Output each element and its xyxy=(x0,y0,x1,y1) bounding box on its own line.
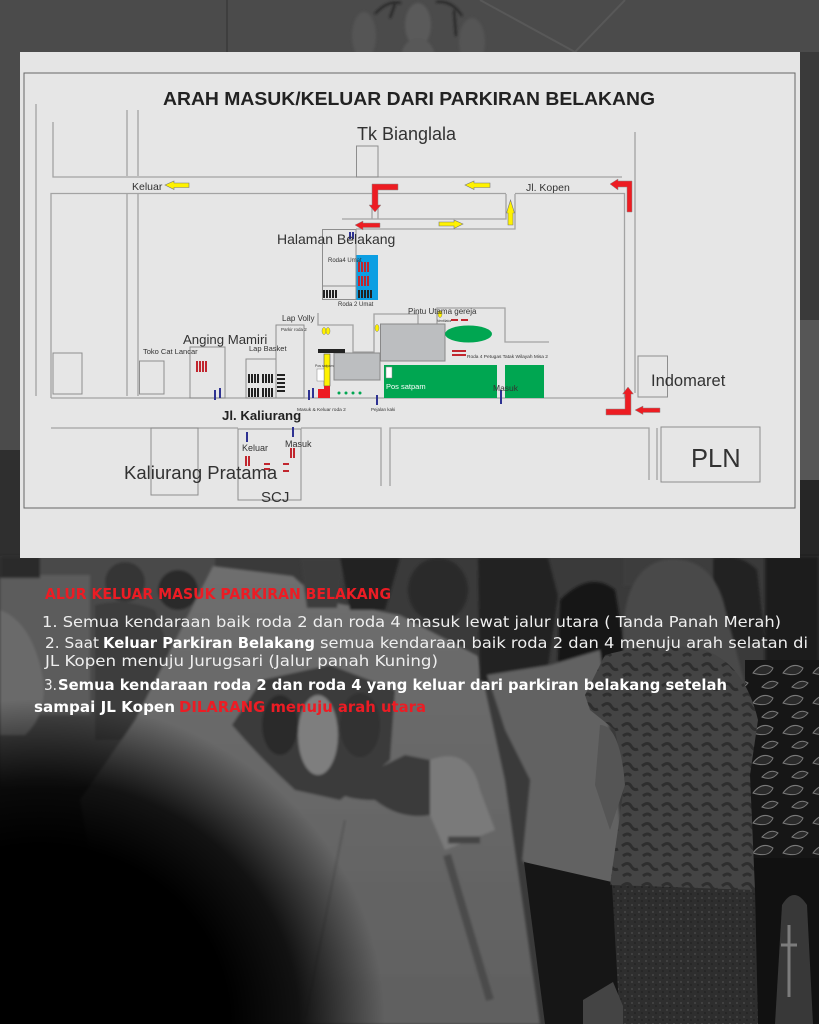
map labels: Roda4 Umat xyxy=(328,258,362,264)
embroidered panel xyxy=(232,665,395,800)
heading: alur keluar masuk: ALUR KELUAR MASUK PARKIRAN BELAKANG xyxy=(45,585,391,603)
green areas xyxy=(384,326,544,398)
map labels: PLN xyxy=(691,445,741,473)
dark gradient vignette xyxy=(0,695,390,1024)
hands xyxy=(335,755,430,816)
map labels xyxy=(124,124,741,506)
map labels: Keluar xyxy=(242,443,268,453)
gate elements xyxy=(317,310,442,398)
batik dress xyxy=(745,660,819,858)
map labels: Roda 4 Petugas Tatak Wilayah Misa 2 xyxy=(467,354,548,360)
map labels: Kaliurang Pratama xyxy=(124,462,278,483)
priest robe xyxy=(80,558,540,1024)
map labels: SCJ xyxy=(261,489,289,506)
map labels: Ventilator xyxy=(437,319,452,323)
gray church buildings xyxy=(334,353,380,380)
map labels: Parkir roda 2 xyxy=(281,327,307,332)
map labels: Pejalan kaki xyxy=(371,407,395,412)
panel: parking map xyxy=(20,52,800,558)
pew end with cross xyxy=(775,895,813,1024)
blue parking area xyxy=(356,255,378,300)
map labels: Toko Cat Lancar xyxy=(143,347,198,356)
arm xyxy=(595,725,625,830)
roads xyxy=(36,104,657,486)
building outlines xyxy=(53,146,760,500)
woman lace blouse xyxy=(585,646,758,895)
instruction 3: DILARANG menuju arah utara xyxy=(179,698,426,716)
map labels: Lap Basket xyxy=(249,344,287,353)
instruction 2 xyxy=(44,634,808,670)
instruction 2: Keluar Parkiran Belakang xyxy=(103,634,315,652)
map labels: Indomaret xyxy=(651,372,726,390)
map frame xyxy=(24,73,795,508)
map labels: Anging Mamiri xyxy=(183,332,267,347)
map labels: Masuk xyxy=(493,383,519,393)
red entry arrows xyxy=(355,179,660,415)
woman hair xyxy=(623,559,745,685)
parked vehicle icons xyxy=(197,232,501,471)
map labels: Lap Volly xyxy=(282,314,314,323)
instruction 3: sampai JL Kopen xyxy=(34,698,175,716)
map labels: Tk Bianglala xyxy=(357,124,457,144)
map labels: Roda 2 Umat xyxy=(338,302,374,308)
instruction 2: JL Kopen menuju Jurugsari (Jalur panah Kuning) xyxy=(44,652,438,670)
instruction 2: semua kendaraan baik roda 2 dan 4 menuju arah selatan di xyxy=(320,634,808,652)
map labels: Masuk xyxy=(285,439,312,449)
left crowd xyxy=(0,556,215,786)
box on floor xyxy=(583,982,623,1024)
woman skirt xyxy=(612,885,758,1024)
instruction 3 xyxy=(34,676,727,716)
map labels: Jl. Kaliurang xyxy=(222,408,301,423)
map labels: Pos satpam xyxy=(386,382,426,391)
map labels: Masuk & Keluar roda 2 xyxy=(297,407,346,413)
pos satpam marker xyxy=(386,367,392,378)
map labels: Pintu Utama gereja xyxy=(408,307,477,316)
instruction 1: 1. Semua kendaraan baik roda 2 dan roda 4 masuk lewat jalur utara ( Tanda Panah Merah) xyxy=(42,613,781,631)
yellow exit arrows xyxy=(165,181,514,228)
chandelier xyxy=(352,2,485,86)
map labels: Pos satpam xyxy=(315,364,334,368)
instruction 2: 2. Saat xyxy=(45,634,99,652)
instruction 3: 3. xyxy=(44,676,57,694)
map labels: Jl. Kopen xyxy=(526,182,570,194)
map labels: Keluar xyxy=(132,181,163,193)
girl trousers xyxy=(524,862,625,1024)
right crowd xyxy=(408,556,819,885)
instruction 3: Semua kendaraan roda 2 dan roda 4 yang keluar dari parkiran belakang setelah xyxy=(58,676,727,694)
map title: ARAH MASUK/KELUAR DARI PARKIRAN BELAKANG xyxy=(163,88,655,109)
pink blouse of girl xyxy=(487,650,625,885)
text block: parking flow instructions xyxy=(34,585,808,716)
map labels: Halaman Belakang xyxy=(277,231,395,247)
